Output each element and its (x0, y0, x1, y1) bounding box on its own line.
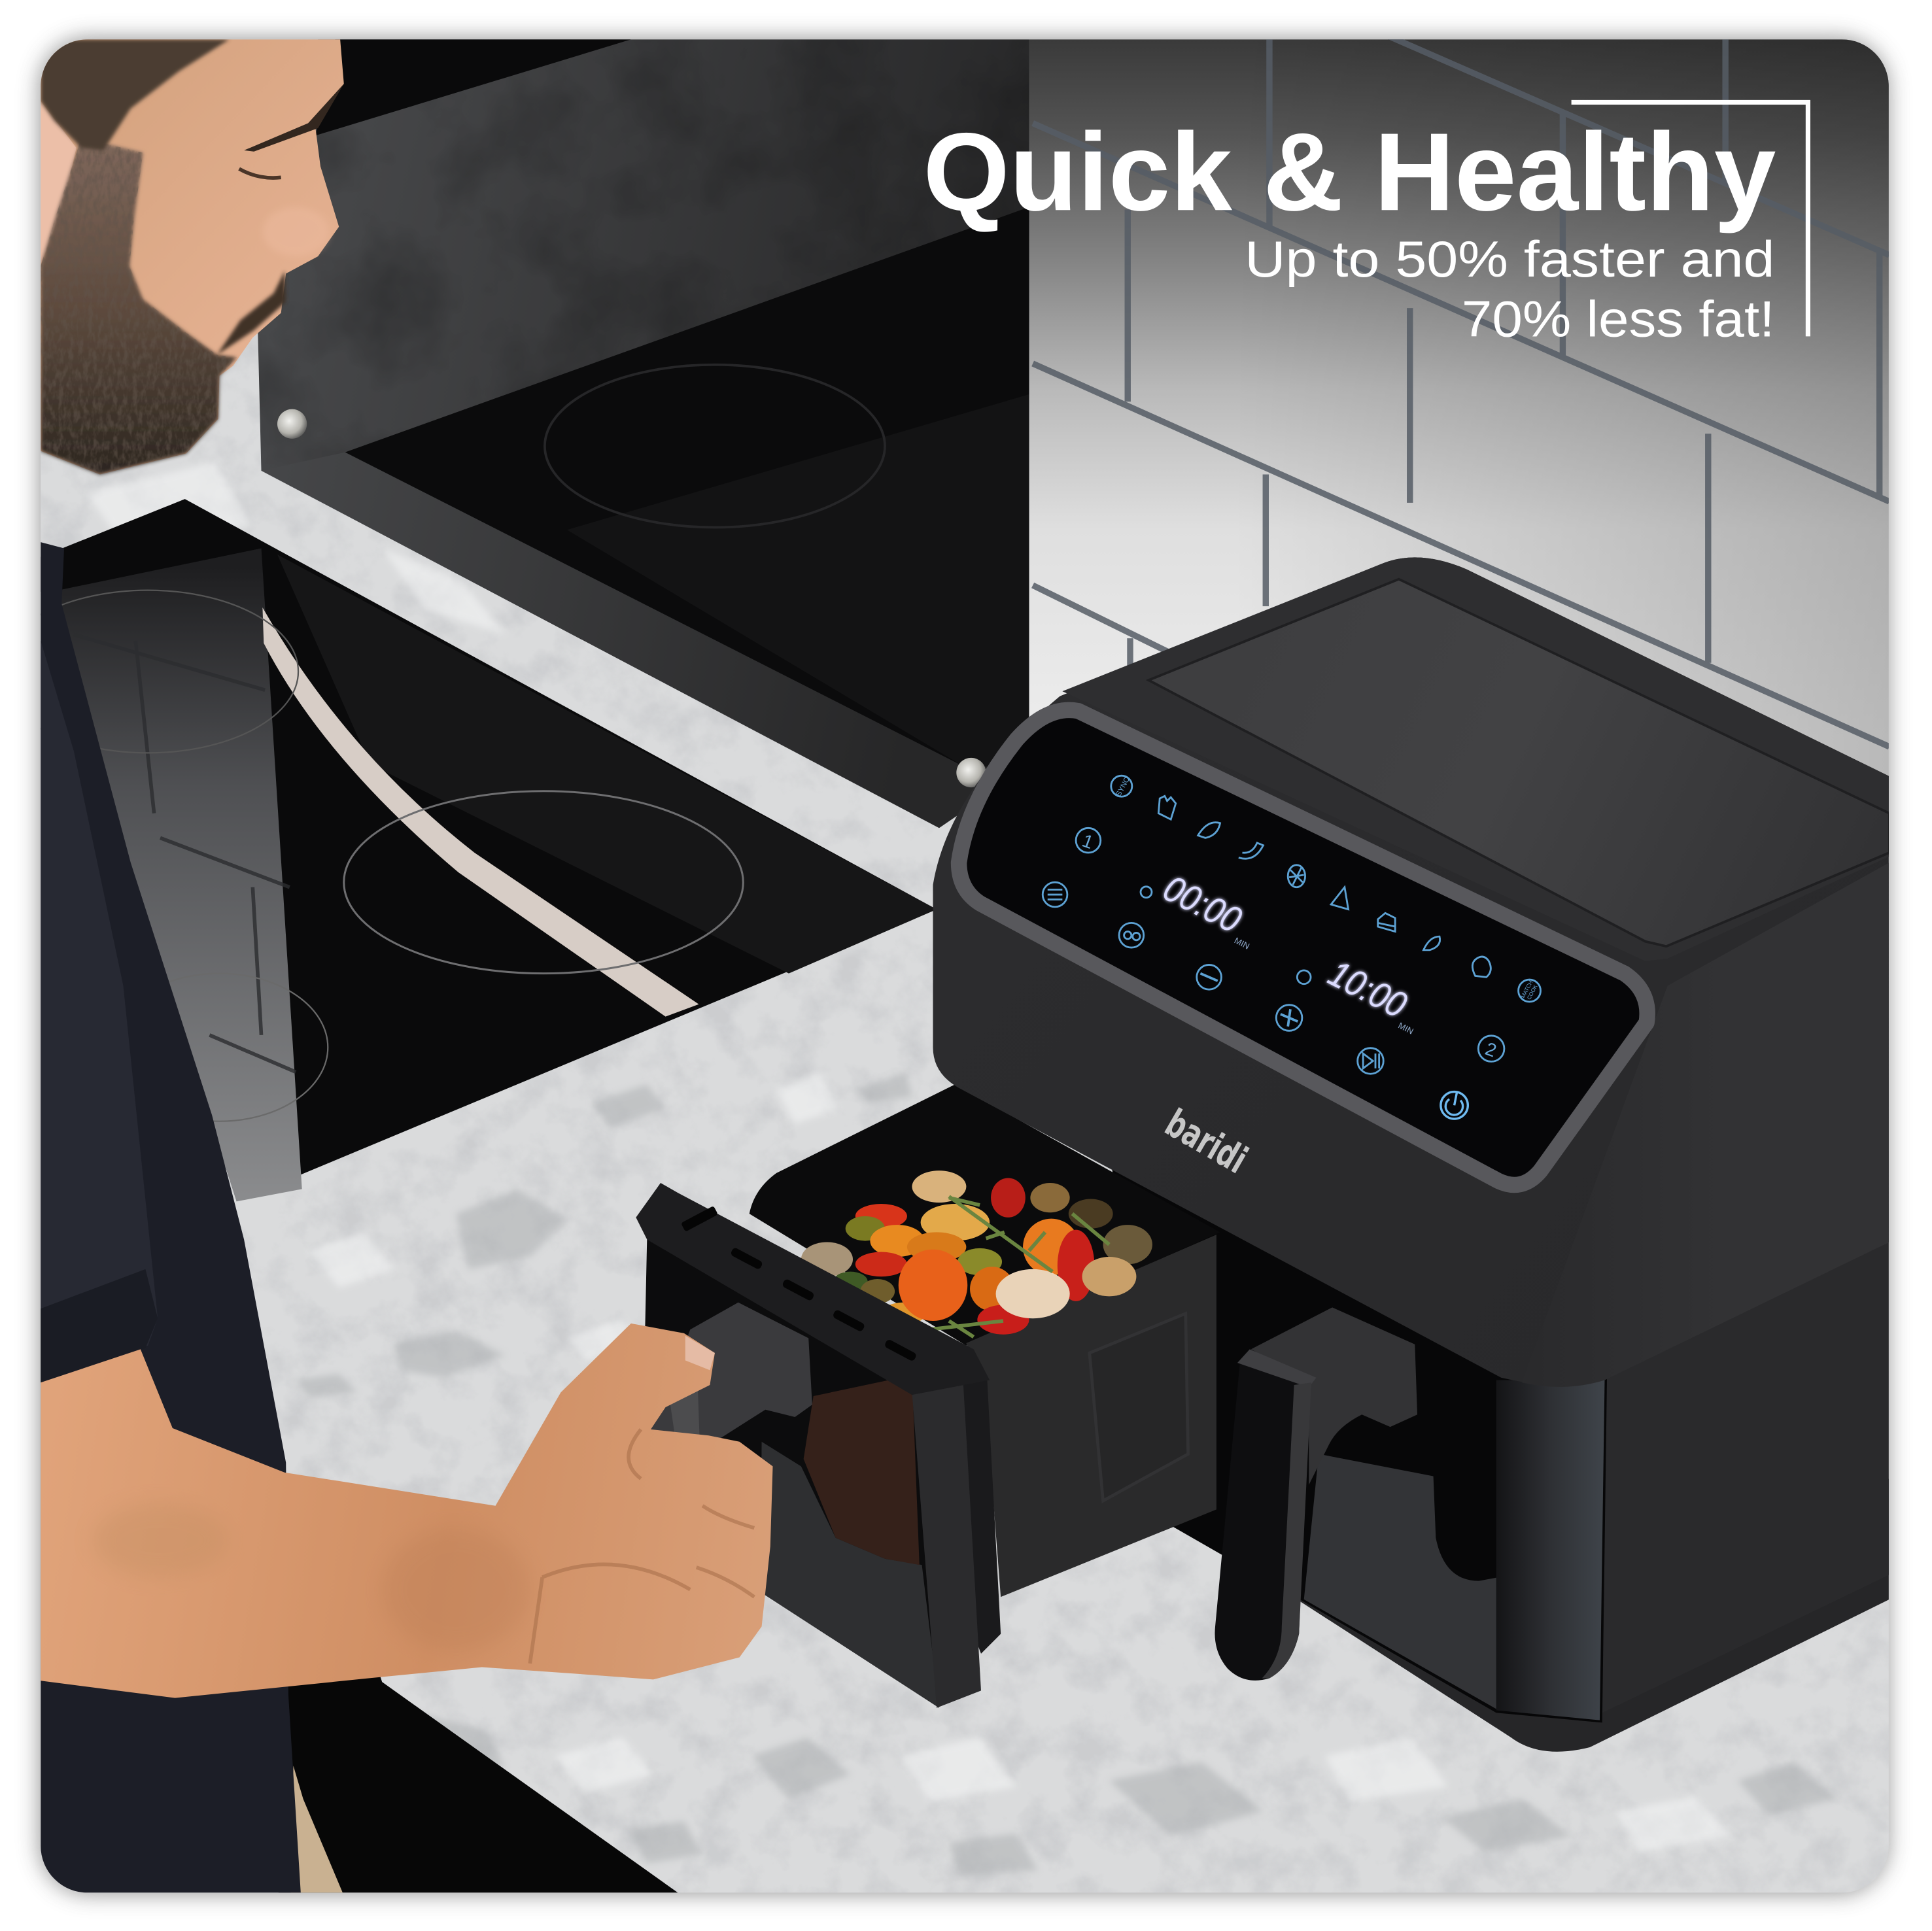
drawer side frame (961, 1368, 1001, 1654)
tile reflection (41, 549, 302, 1201)
button zone 1: 1 (1080, 830, 1096, 853)
face (41, 39, 344, 474)
ear and neck (41, 101, 77, 265)
button power (1441, 1092, 1468, 1119)
right side lower body (1597, 1242, 1889, 1715)
right drawer glass (1109, 1152, 1607, 1722)
button match cook: COOK (1525, 983, 1539, 1000)
nose highlight (262, 207, 329, 256)
button plus (1276, 1005, 1302, 1031)
icon pizza (1331, 887, 1349, 910)
min label left: MIN (1233, 935, 1251, 951)
top surface (1062, 557, 1889, 961)
moustache (217, 271, 286, 355)
button menu (1043, 882, 1067, 907)
control bezel (959, 710, 1647, 1185)
top lid (1148, 579, 1889, 946)
button match cook (1519, 980, 1540, 1002)
thumb nail (685, 1336, 715, 1370)
display right: 10:00 (1322, 952, 1413, 1026)
stone chips (296, 1072, 1837, 1875)
top strip (636, 1183, 990, 1395)
reflection of counter (761, 1442, 939, 1708)
subheading line two: 70% less fat! (1462, 290, 1775, 347)
basket side (966, 1235, 1216, 1597)
food (801, 1171, 1152, 1337)
air fryer (636, 557, 1889, 1752)
icon fries (1158, 796, 1176, 819)
cabinet below counter (279, 1651, 678, 1892)
eyebrow (244, 84, 344, 152)
shirt sleeve (41, 641, 158, 1382)
glass corner reflection (1496, 1380, 1604, 1720)
button zone 1 (1076, 828, 1101, 853)
hob ring upper (0, 590, 298, 753)
rosemary (918, 1197, 1109, 1337)
left drawer front (636, 1183, 1001, 1708)
icon grill (1288, 865, 1305, 887)
display left: 00:00 (1157, 867, 1248, 941)
icon broccoli (1472, 957, 1491, 977)
heading: Quick & Healthy (923, 109, 1776, 233)
bolt right (956, 758, 986, 787)
timer icon left (1141, 887, 1152, 898)
top black band (315, 39, 631, 135)
button sync: SYNC (1114, 776, 1131, 798)
button match cook: MATCH (1519, 980, 1534, 999)
induction hob (0, 499, 937, 1201)
right handle (1215, 1307, 1417, 1681)
handle grip (1215, 1363, 1309, 1681)
forearm and hand (41, 1324, 773, 1698)
vent slots (681, 1206, 917, 1362)
button minus (1197, 965, 1221, 989)
icon chicken (1423, 936, 1440, 950)
handle face (668, 1382, 700, 1452)
brand logo: baridi (1158, 1101, 1255, 1182)
handle block (1251, 1307, 1417, 1485)
hand shading (530, 1429, 754, 1664)
black glass splashback (252, 39, 1029, 828)
icon shrimp (1239, 843, 1264, 859)
basket recess (1090, 1314, 1188, 1501)
closed eye (239, 169, 281, 178)
subheading line one: Up to 50% faster and (1245, 230, 1775, 288)
hand reflection (804, 1375, 920, 1565)
marble countertop (41, 333, 1889, 1892)
basket interior (750, 1084, 1220, 1346)
grip top cap (1237, 1349, 1317, 1388)
button zone 2: 2 (1483, 1038, 1500, 1061)
reflected hob ring (545, 365, 885, 528)
right shoulder (1522, 863, 1889, 1387)
button zone 2 (1478, 1036, 1504, 1061)
corner bracket (1572, 102, 1808, 336)
hair (41, 39, 230, 150)
black reflection (345, 207, 1029, 766)
white streak reflection (262, 607, 699, 1017)
beard (41, 138, 237, 474)
shirt torso (41, 542, 301, 1892)
drawer front edge (912, 1371, 981, 1708)
beard texture (41, 135, 244, 481)
drawer glass (644, 1239, 939, 1708)
button play pause (1358, 1048, 1383, 1074)
min label right: MIN (1396, 1020, 1415, 1036)
button shake (1119, 923, 1144, 948)
forearm shading (382, 1528, 530, 1651)
man head (41, 39, 344, 481)
elbow shading (92, 1503, 228, 1577)
left handle (651, 1303, 812, 1453)
tiled wall (1029, 27, 1889, 789)
reflection in right drawer (1304, 1454, 1498, 1711)
bolt left (277, 409, 307, 439)
upper body (933, 557, 1889, 1386)
trousers (291, 1766, 343, 1892)
hob ring (344, 791, 743, 974)
icon fish (1198, 823, 1220, 838)
grip edge (1262, 1382, 1311, 1679)
control panel (1043, 776, 1540, 1119)
sleeve cuff (41, 1269, 158, 1382)
headline block (923, 102, 1808, 347)
icon cake (1378, 913, 1395, 932)
timer icon right (1297, 970, 1311, 984)
base rim (1282, 1478, 1889, 1752)
hob ring lower (111, 974, 328, 1121)
